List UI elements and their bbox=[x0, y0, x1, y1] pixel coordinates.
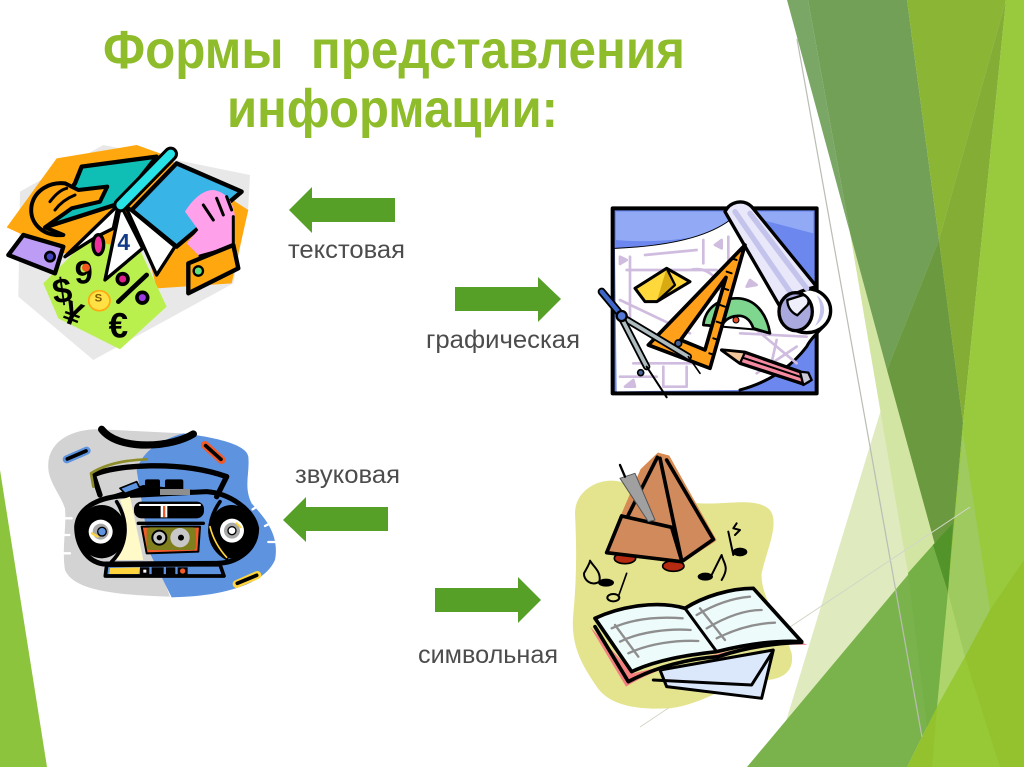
arrow: right to symbols bbox=[435, 577, 541, 623]
pencil bbox=[722, 350, 812, 385]
protractor bbox=[703, 298, 770, 333]
body bbox=[77, 492, 257, 564]
arrow: left to text bbox=[289, 187, 395, 233]
label: звуковая: звуковая bbox=[295, 461, 400, 489]
symbols: 4 bbox=[117, 229, 130, 255]
set square bbox=[648, 245, 745, 368]
icon: drafting tools bbox=[602, 202, 831, 397]
title: Формы представления bbox=[103, 20, 685, 80]
symbols: S bbox=[95, 293, 103, 305]
symbols: € bbox=[109, 306, 128, 345]
dashes bbox=[63, 445, 277, 584]
open book bbox=[590, 588, 807, 687]
loose sheets bbox=[653, 650, 773, 698]
left speaker bbox=[78, 502, 126, 562]
title: информации: bbox=[227, 79, 558, 139]
icon: metronome and sheet music bbox=[573, 454, 807, 709]
tuner bbox=[134, 502, 204, 523]
control panel bbox=[105, 565, 224, 576]
arrow: right to graphics bbox=[455, 277, 561, 322]
eraser bbox=[635, 268, 690, 302]
symbols: $ bbox=[50, 270, 75, 312]
music notes bbox=[584, 523, 747, 601]
right speaker bbox=[208, 502, 255, 558]
icon: radio boombox bbox=[48, 429, 277, 597]
blueprint lines bbox=[620, 237, 807, 387]
label: графическая: графическая bbox=[426, 326, 580, 354]
arrow: left to sound bbox=[283, 497, 388, 542]
title bbox=[103, 20, 685, 139]
symbols bbox=[50, 229, 148, 345]
symbols: 9 bbox=[75, 253, 93, 290]
cassette bbox=[142, 527, 200, 553]
icon: book with hands and symbols bbox=[7, 145, 250, 360]
metronome bbox=[607, 454, 715, 571]
symbols: ¥ bbox=[58, 294, 88, 335]
paper roll bbox=[725, 202, 831, 333]
compass bbox=[602, 292, 700, 397]
label: текстовая: текстовая bbox=[288, 236, 405, 264]
handle bbox=[93, 466, 227, 497]
label: символьная: символьная bbox=[418, 641, 558, 669]
